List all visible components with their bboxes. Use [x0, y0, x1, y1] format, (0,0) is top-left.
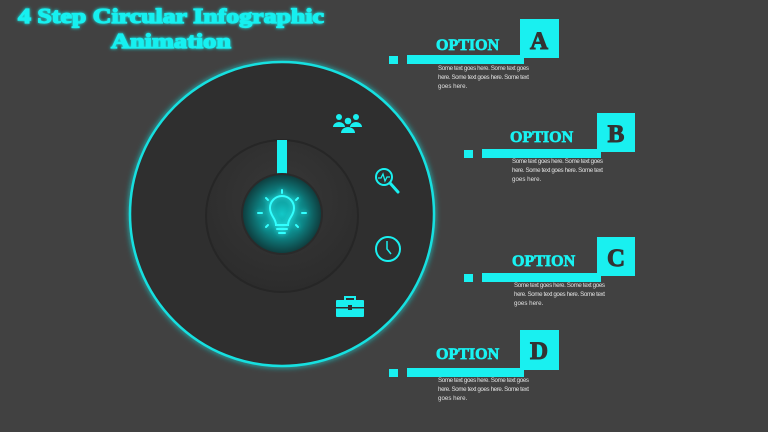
- option A: Some text goes here. Some text goes: [438, 65, 529, 72]
- option D: here. Some text goes here. Some text: [438, 386, 529, 393]
- option A: [389, 19, 559, 90]
- icon: magnifier: [376, 169, 398, 192]
- option C: OPTION: [512, 253, 576, 270]
- option B: here. Some text goes here. Some text: [512, 167, 603, 174]
- option B: OPTION: [510, 129, 574, 146]
- icon: clock: [376, 237, 400, 261]
- inner ring: [206, 140, 358, 292]
- title: Animation: [111, 29, 231, 53]
- icon: people: [333, 114, 362, 133]
- option C: C: [607, 245, 625, 272]
- option B: B: [608, 121, 624, 148]
- option A: goes here.: [438, 83, 468, 90]
- option D: OPTION: [436, 346, 500, 363]
- circular diagram: [130, 62, 434, 366]
- option B: goes here.: [512, 176, 542, 183]
- option C: goes here.: [514, 300, 544, 307]
- option D: goes here.: [438, 395, 468, 402]
- icon: briefcase: [336, 296, 364, 317]
- option A: OPTION: [436, 37, 500, 54]
- option D: D: [530, 338, 548, 365]
- option D: [389, 330, 559, 402]
- option B: [464, 113, 635, 183]
- option B: Some text goes here. Some text goes: [512, 158, 603, 165]
- option C: [464, 237, 635, 307]
- option C: here. Some text goes here. Some text: [514, 291, 605, 298]
- title: [18, 4, 324, 53]
- center glow with bulb: [242, 174, 322, 254]
- title: 4 Step Circular Infographic: [18, 4, 324, 28]
- option D: Some text goes here. Some text goes: [438, 377, 529, 384]
- option A: here. Some text goes here. Some text: [438, 74, 529, 81]
- option A: A: [530, 28, 548, 55]
- indicator bar: [277, 140, 287, 176]
- option C: Some text goes here. Some text goes: [514, 282, 605, 289]
